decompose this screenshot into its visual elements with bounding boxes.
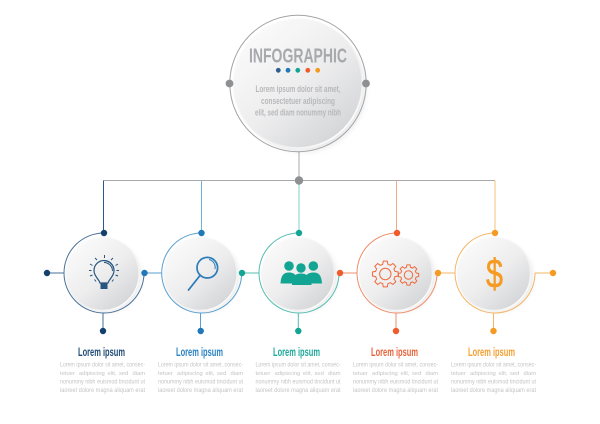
icon: dollar: $	[486, 250, 503, 296]
text block 1: diam	[132, 371, 145, 377]
icon: light bulb	[89, 255, 119, 289]
text block 2: tetuer	[158, 371, 173, 377]
text block 3: elit,	[303, 371, 312, 377]
text block 5: diam	[524, 371, 536, 377]
text block 2: sed	[217, 371, 226, 377]
text block 1: tetuer	[60, 371, 75, 377]
step 4: settings	[337, 230, 437, 334]
text block 2: laoreet dolore magna aliquam erat	[158, 387, 243, 394]
text block 2: nonummy nibh euismod tincidunt ut	[158, 378, 243, 386]
text block 2	[158, 347, 243, 394]
text block 2: elit,	[206, 371, 215, 377]
step 2: search	[141, 230, 242, 334]
text block 3: nonummy nibh euismod tincidunt ut	[256, 378, 341, 386]
icon: magnifier	[188, 257, 218, 290]
text block 3: tetuer	[256, 371, 270, 377]
text block 1: elit,	[108, 371, 117, 377]
text block 3	[256, 347, 341, 394]
icon: people	[280, 261, 322, 285]
text block 5	[451, 347, 536, 394]
text block 4: Lorem ipsum dolor sit amet, consec-	[353, 362, 438, 368]
step 1: idea	[44, 230, 144, 334]
text block 2: adipiscing	[177, 371, 203, 377]
text block 3: adipiscing	[274, 371, 300, 377]
text block 2: diam	[230, 371, 243, 377]
text block 2: Lorem ipsum dolor sit amet, consec-	[158, 362, 243, 368]
text block 4: nonummy nibh euismod tincidunt ut	[353, 378, 438, 386]
text block 3: laoreet dolore magna aliquam erat	[256, 387, 341, 394]
text block 1: Lorem ipsum	[78, 347, 125, 359]
text block 4: tetuer	[353, 371, 368, 377]
text block 3: diam	[328, 371, 341, 377]
text block 4: elit,	[400, 371, 410, 377]
text block 4: diam	[426, 371, 438, 377]
text block 1: adipiscing	[79, 371, 105, 377]
text block 5: nonummy nibh euismod tincidunt ut	[451, 378, 536, 386]
text block 1: laoreet dolore magna aliquam erat	[60, 387, 145, 394]
text block 3: Lorem ipsum dolor sit amet, consec-	[256, 362, 340, 368]
intro text: Lorem ipsum dolor sit amet,	[256, 84, 340, 94]
heading: INFOGRAPHIC	[249, 46, 347, 68]
text block 5: Lorem ipsum	[468, 347, 515, 359]
intro text: elit, sed diam nonummy nibh	[255, 108, 341, 118]
text block 4	[353, 347, 438, 394]
text block 4: sed	[412, 371, 421, 377]
panel: main circle	[226, 15, 370, 152]
text block 5: elit,	[498, 371, 508, 377]
text block 5: laoreet dolore magna aliquam erat	[451, 387, 536, 394]
text block 5: tetuer	[451, 371, 466, 377]
text block 2: Lorem ipsum	[176, 347, 223, 359]
text block 1: Lorem ipsum dolor sit amet, consec-	[60, 362, 145, 368]
text block 5: adipiscing	[470, 371, 496, 377]
text block 5: Lorem ipsum dolor sit amet, consec-	[451, 362, 536, 368]
text block 3: Lorem ipsum	[273, 347, 320, 359]
text block 4: Lorem ipsum	[371, 347, 418, 359]
icon: gears	[372, 261, 419, 287]
text block 4: adipiscing	[372, 371, 398, 377]
step 5: finance	[435, 230, 556, 334]
intro text: consectetuer adipiscing	[261, 96, 335, 106]
colour dots	[276, 68, 320, 73]
text block 4: laoreet dolore magna aliquam erat	[353, 387, 438, 394]
text block 3: sed	[314, 371, 324, 377]
connector tree	[104, 152, 495, 233]
intro text	[255, 84, 341, 118]
hub dot	[295, 176, 303, 185]
text block 1	[60, 347, 145, 394]
text block 1: sed	[119, 371, 128, 377]
text block 5: sed	[510, 371, 519, 377]
text block 1: nonummy nibh euismod tincidunt ut	[60, 378, 145, 386]
step 3: team	[239, 230, 339, 334]
